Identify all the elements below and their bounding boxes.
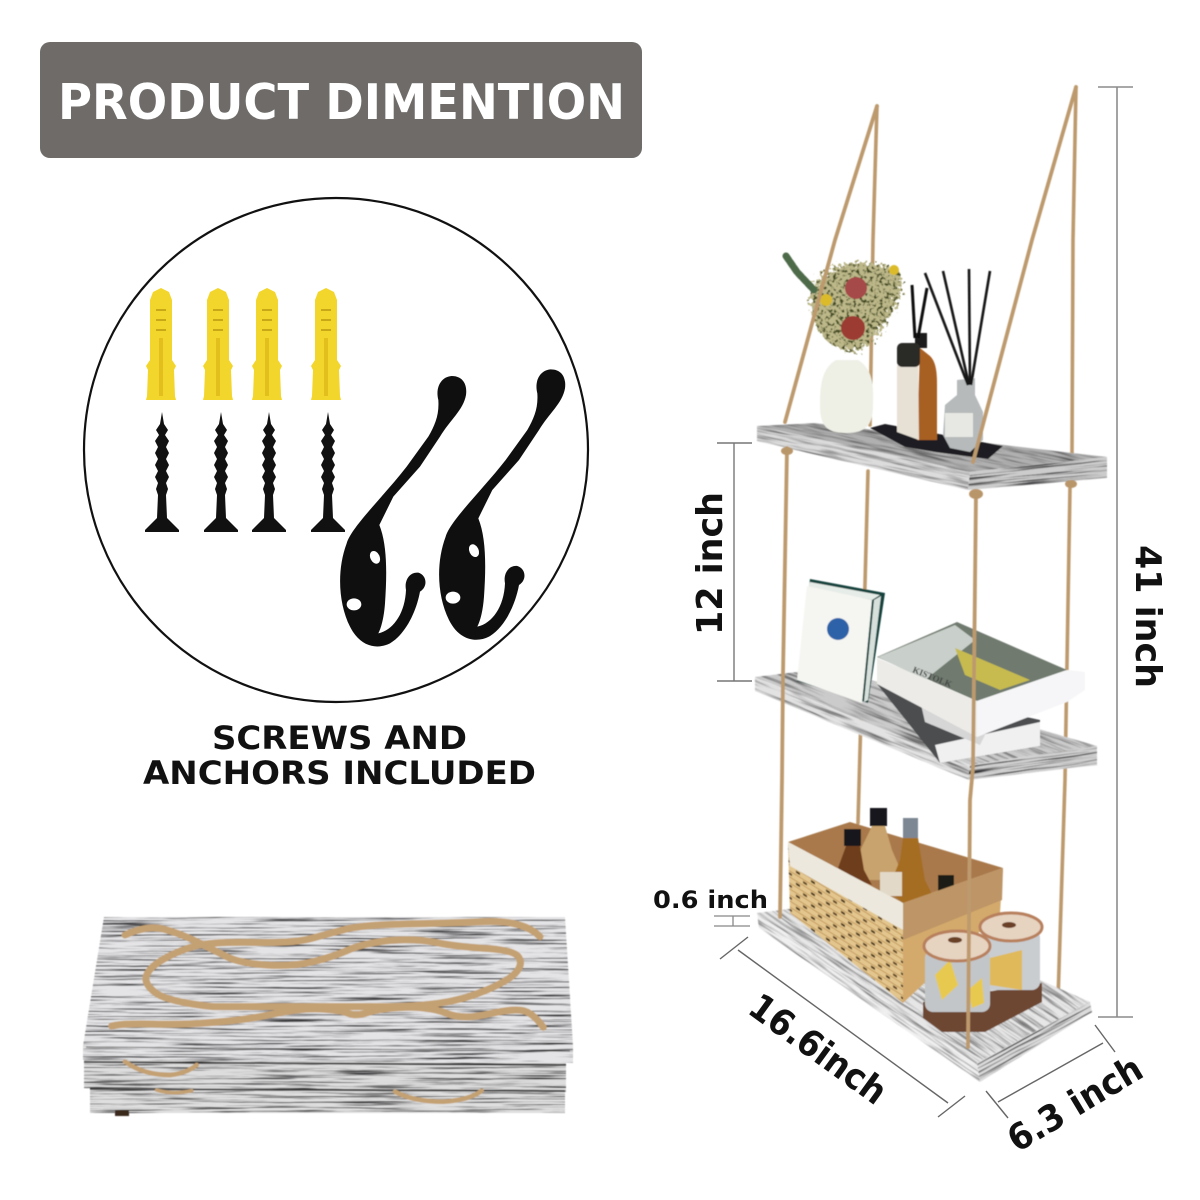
caption: screws and anchors included	[143, 719, 536, 792]
dimension: 0.6 inch thickness: 0.6 inch	[653, 886, 768, 914]
product: three-tier hanging shelf	[679, 87, 1166, 1200]
dimension: 41 inch height: 41 inch	[1127, 545, 1168, 688]
dimension: 12 inch spacing: 12 inch	[690, 492, 731, 635]
basket with bottles	[788, 808, 1003, 1003]
caption: screws and anchors included: SCREWS AND	[212, 719, 467, 757]
panel: included hardware circle	[84, 198, 588, 702]
dimension: 16.6 inch length	[720, 937, 965, 1117]
back ropes	[858, 87, 1076, 1000]
bottles	[838, 808, 954, 905]
white vase	[820, 360, 873, 433]
shelf 1 top	[744, 352, 1117, 543]
front ropes	[780, 87, 1076, 1047]
icon: black screws	[145, 412, 345, 532]
title banner	[40, 42, 642, 158]
picture frame	[797, 579, 885, 703]
stacked books	[877, 622, 1085, 763]
caption: screws and anchors included: ANCHORS INCLUDED	[143, 754, 536, 792]
dimension: 6.3 inch depth: 6.3 inch	[1001, 1048, 1150, 1161]
dimension: 0.6 inch thickness	[653, 886, 768, 926]
icon: yellow wall anchors	[146, 288, 341, 400]
photo: folded wooden shelves with rope	[83, 917, 573, 1116]
black tray	[870, 424, 1003, 459]
jars on tray	[923, 913, 1042, 1032]
dimension: 16.6 inch length: 16.6inch	[741, 986, 894, 1113]
icon: black double hooks	[340, 369, 565, 646]
dried flower bouquet	[786, 256, 902, 351]
shelf 2 middle	[719, 549, 1131, 884]
amber bottle	[897, 285, 937, 440]
shelf 3 bottom	[679, 746, 1166, 1200]
reed diffuser	[925, 269, 990, 452]
rope knots	[781, 447, 1077, 499]
title banner: PRODUCT DIMENTION	[58, 74, 625, 131]
stacked books: KISTOLK	[911, 665, 953, 689]
